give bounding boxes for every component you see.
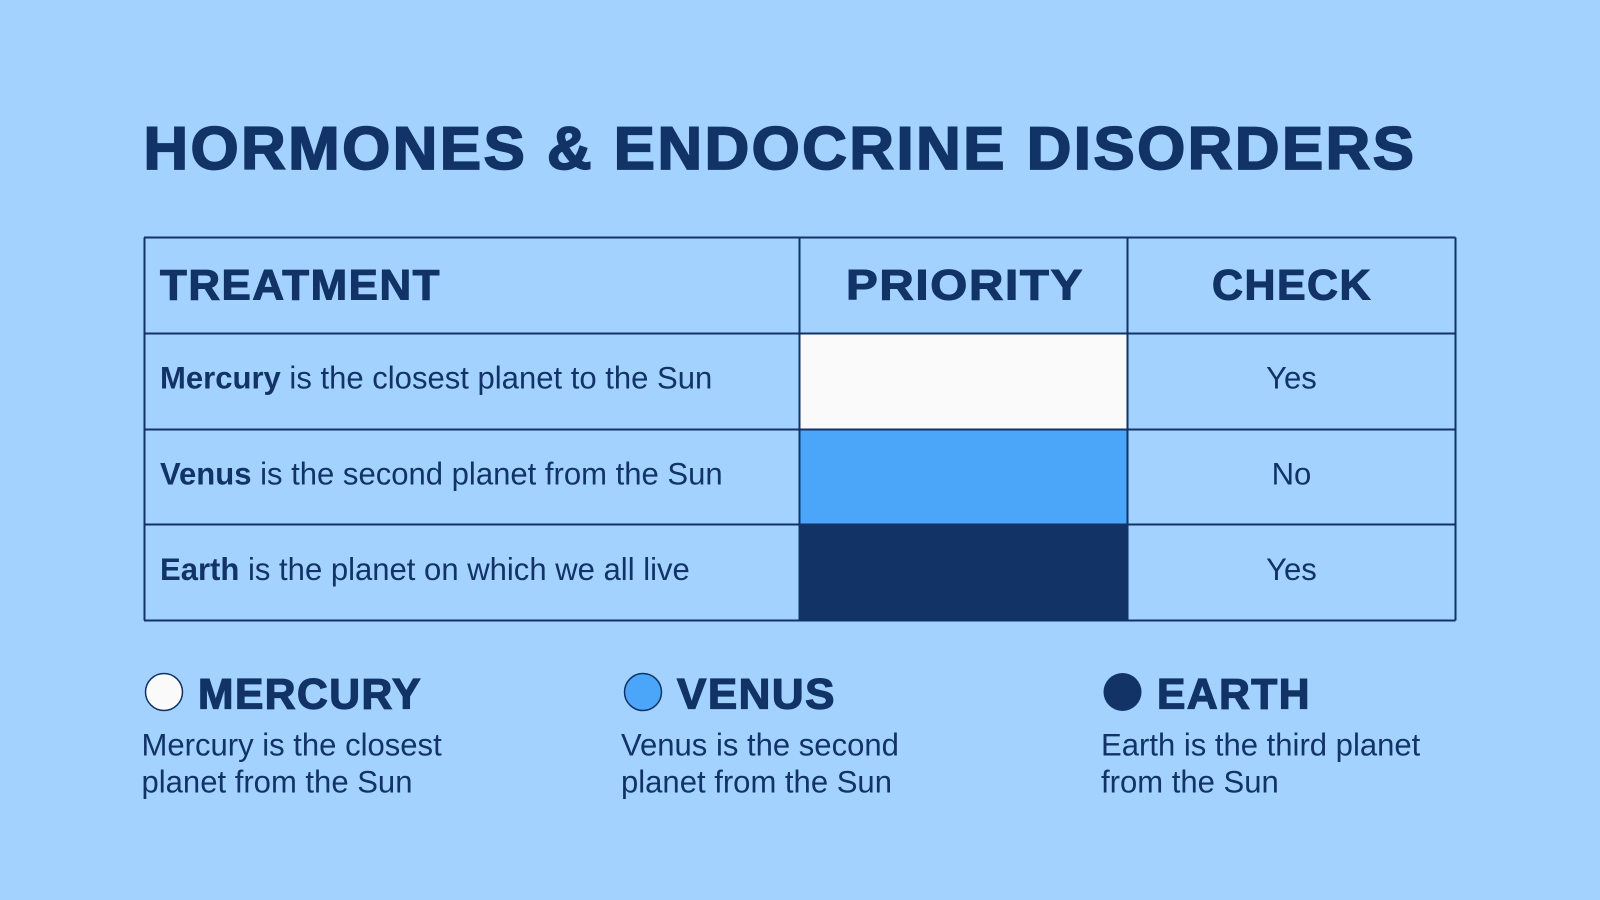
row 3 check: Yes: [1266, 552, 1317, 587]
row 1 treatment: Mercury is the closest planet to the Sun: [160, 360, 712, 395]
priority swatch: navy: [800, 524, 1128, 620]
priority swatch: white: [800, 333, 1128, 429]
legend: earth: [1101, 670, 1421, 800]
legend text: venus: Venus is the second: [621, 727, 899, 762]
header: check: CHECK: [1212, 262, 1372, 310]
icon: blue circle: [624, 674, 662, 710]
icon: white circle: [146, 674, 182, 710]
legend text: mercury: Mercury is the closest: [142, 727, 442, 762]
row 2 check: No: [1272, 456, 1311, 491]
title: HORMONES & ENDOCRINE DISORDERS: [144, 115, 1417, 182]
legend heading: earth: EARTH: [1157, 670, 1311, 718]
legend heading: mercury: MERCURY: [198, 670, 422, 718]
icon: navy circle: [1104, 673, 1142, 711]
row 3 treatment: Earth is the planet on which we all live: [160, 552, 690, 587]
legend text: earth: from the Sun: [1101, 764, 1279, 800]
legend heading: venus: VENUS: [677, 670, 836, 718]
row 2 treatment: Venus is the second planet from the Sun: [160, 456, 723, 491]
header: priority: PRIORITY: [846, 262, 1084, 310]
priority swatch: blue: [800, 429, 1128, 524]
table grid: [144, 238, 1456, 620]
row 1 check: Yes: [1266, 360, 1317, 395]
header: treatment: TREATMENT: [160, 262, 441, 310]
legend text: earth: Earth is the third planet: [1101, 727, 1421, 762]
legend text: mercury: planet from the Sun: [142, 764, 412, 800]
table: [144, 238, 1456, 620]
legend text: venus: planet from the Sun: [621, 764, 892, 800]
legend: mercury: [142, 670, 442, 800]
legend: venus: [621, 670, 899, 800]
